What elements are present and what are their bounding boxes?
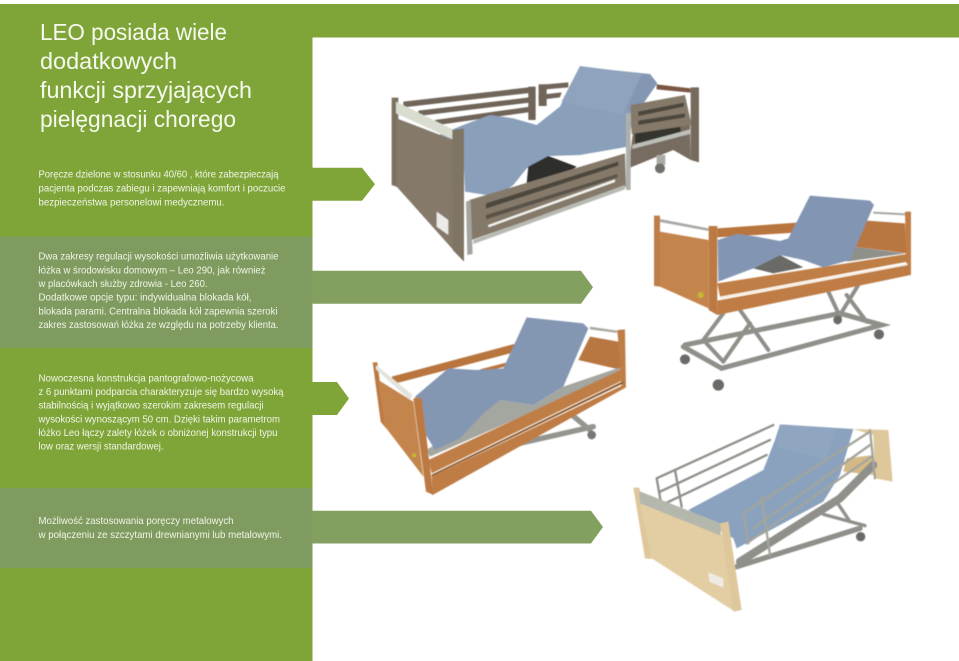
panel: left column green bbox=[0, 4, 312, 661]
bed illustration: taupe bed with split rails bbox=[392, 66, 699, 262]
panel: grey-green band 4 bbox=[0, 488, 312, 568]
text block: split side rails bbox=[38, 168, 286, 208]
text block: metal rails bbox=[38, 515, 282, 541]
bed illustration: light wood bed with metal rails bbox=[633, 424, 893, 612]
text block: scissor construction bbox=[38, 372, 284, 453]
panel: grey-green band 2 bbox=[0, 236, 312, 348]
title: pielęgnacji chorego bbox=[40, 106, 236, 132]
text block: height ranges: łóżka w środowisku domowym – Leo 290, jak również bbox=[38, 264, 266, 276]
text block: split side rails: pacjenta podczas zabiegu i zapewniają komfort i poczucie bbox=[38, 182, 286, 194]
text block: scissor construction: łóżko Leo łączy zalety łóżek o obniżonej konstrukcji typu bbox=[38, 427, 278, 439]
arrow: first feature bbox=[312, 168, 375, 201]
text block: scissor construction: stabilnością i wyjątkowo szerokim zakresem regulacji bbox=[38, 400, 264, 412]
text block: height ranges: Dwa zakresy regulacji wysokości umożliwia użytkowanie bbox=[38, 250, 279, 262]
panel: green top bar bbox=[0, 4, 959, 38]
title bbox=[40, 19, 252, 132]
text block: split side rails: Poręcze dzielone w stosunku 40/60 , które zabezpieczają bbox=[38, 168, 279, 180]
title: funkcji sprzyjających bbox=[40, 77, 252, 103]
text block: scissor construction: low oraz wersji standardowej. bbox=[38, 441, 164, 453]
title: dodatkowych bbox=[40, 48, 177, 74]
text block: scissor construction: z 6 punktami podparcia charakteryzuje się bardzo wysoką bbox=[38, 386, 284, 398]
arrow: second feature bbox=[312, 271, 593, 304]
text block: scissor construction: wysokości wynoszącym 50 cm. Dzięki takim parametrom bbox=[38, 414, 280, 426]
arrow: fourth feature bbox=[312, 511, 603, 544]
text block: height ranges: blokada parami. Centralna blokada kół zapewnia szeroki bbox=[38, 306, 278, 318]
title: LEO posiada wiele bbox=[40, 19, 227, 45]
text block: split side rails: bezpieczeństwa personelowi medycznemu. bbox=[38, 196, 224, 208]
text block: metal rails: Możliwość zastosowania poręczy metalowych bbox=[38, 515, 234, 527]
bed illustration: orange wood high bed with scissor lift bbox=[654, 196, 911, 391]
text block: height ranges bbox=[38, 250, 279, 331]
text block: height ranges: zakres zastosowań łóżka ze względu na potrzeby klienta. bbox=[38, 319, 278, 331]
text block: scissor construction: Nowoczesna konstrukcja pantografowo-nożycowa bbox=[38, 372, 254, 384]
text block: height ranges: Dodatkowe opcje typu: indywidualna blokada kół, bbox=[38, 292, 252, 304]
text block: metal rails: w połączeniu ze szczytami drewnianymi lub metalowymi. bbox=[38, 529, 282, 541]
text block: height ranges: w placówkach służby zdrowia - Leo 260. bbox=[38, 278, 208, 290]
bed illustration: orange wood low bed bbox=[373, 317, 626, 495]
arrow: third feature bbox=[312, 382, 349, 415]
